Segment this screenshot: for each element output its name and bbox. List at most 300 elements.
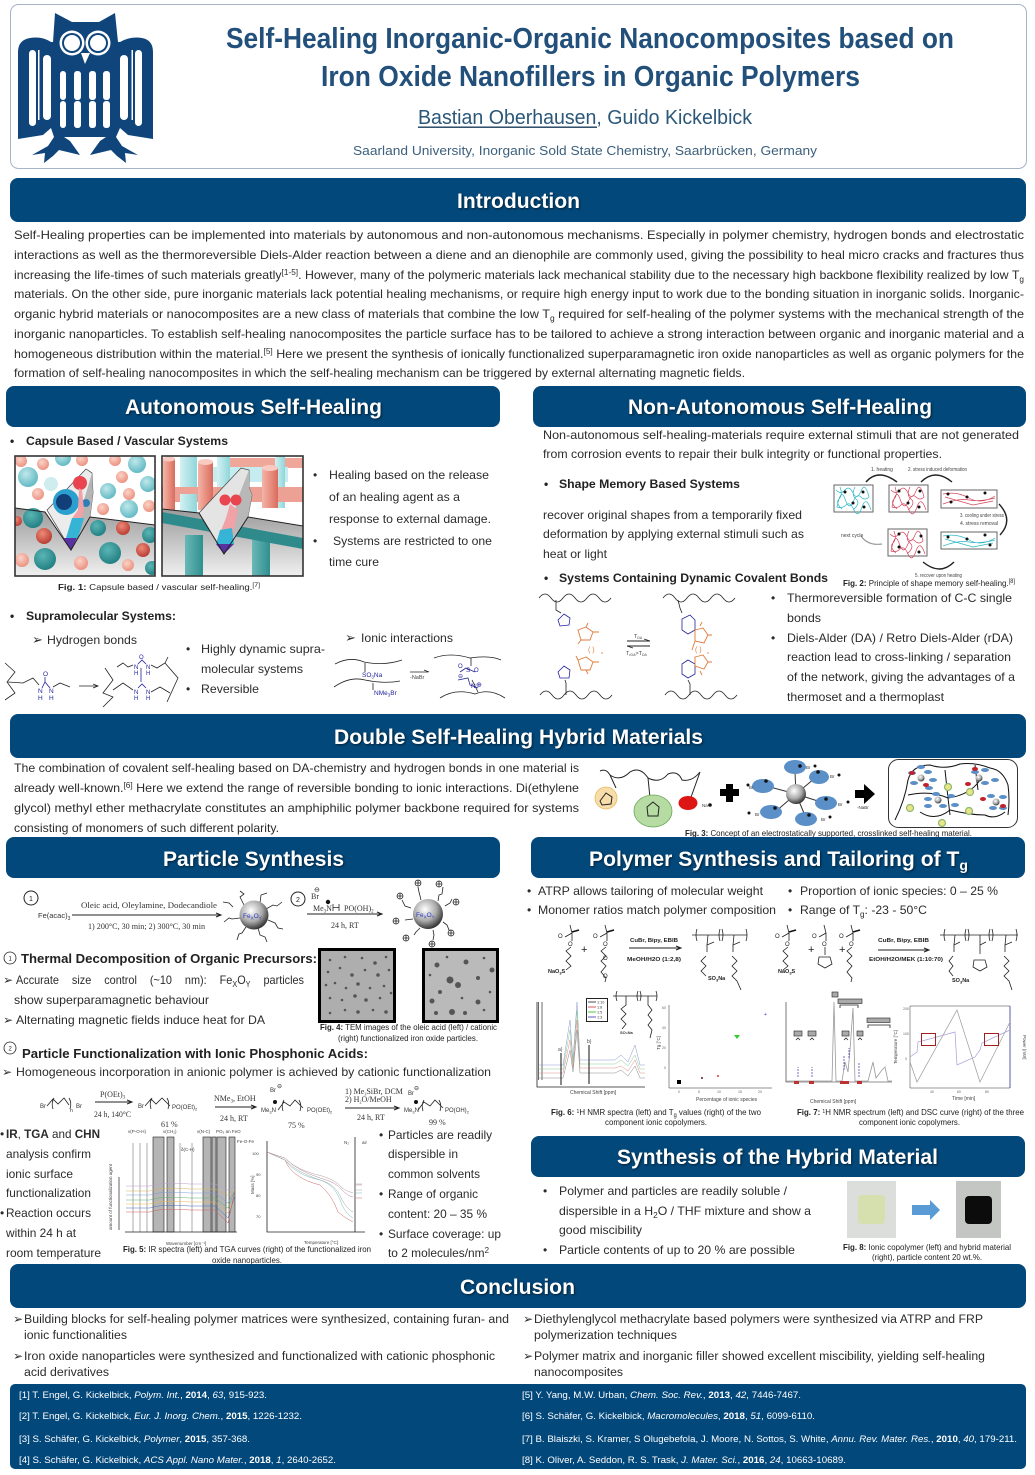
subheading: thermal decomposition: 1 <box>8 956 12 962</box>
text: dispersibility bullets: • <box>379 1187 383 1201</box>
text: Diels-Alder bullets: bonds <box>787 611 821 625</box>
chemical structure: hydrogen bonds: N <box>134 690 138 696</box>
text: dispersibility bullets: dispersible in <box>388 1147 458 1161</box>
chemical structure: ionic interactions: N <box>471 683 476 690</box>
panel: references: [4] S. Schäfer, G. Kickelbick, ACS Appl. Nano Mater. , 2018, 1, 2640-2652. <box>19 1455 336 1465</box>
chemical scheme: particle synthesis: ⊖ <box>314 887 320 894</box>
chemical scheme: phosphonic acid synthesis: NMe <box>214 1094 230 1103</box>
chart: TGA curves <box>250 1137 368 1245</box>
chemical scheme: particle synthesis: O <box>254 913 259 920</box>
chemical scheme: three component copolymer: CuBr, Bipy, EBIB <box>878 938 929 944</box>
chemical scheme: three component copolymer: NaO <box>778 969 789 975</box>
panel: references: [3] S. Schäfer, G. Kickelbick, Polymer , 2015, 357-368. <box>19 1434 250 1444</box>
text: analysis bullets: within 24 h at <box>5 1226 77 1240</box>
caption: figure 7: H NMR spectrum (left) and DSC curve (right) of the three <box>825 1107 1024 1117</box>
text: analysis bullets: IR, TGA and CHN <box>6 1127 100 1141</box>
caption: figure 4: (right) functionalized iron oxide particles. <box>338 1033 478 1043</box>
text block: introduction: materials. On the other side, pure inorganic materials lack potential healing mechanisms, or require high energy input to work due to the bonding situation in inorganic solids. Inorganic- <box>14 287 1024 301</box>
chemical scheme: three component copolymer: S <box>792 969 796 975</box>
chemical scheme: three component copolymer: EtOH/H2O/MEK (1:10:70) <box>869 957 943 963</box>
chemical scheme: phosphonic acid synthesis: 3 <box>412 1110 415 1114</box>
heading: Particle Synthesis <box>6 837 500 878</box>
text block: introduction: formation of self-healing nanocomposites in which the self-healing mechanism can be triggered by external alternating magnetic fields. <box>14 366 745 380</box>
subheading: supramolecular: • <box>10 609 14 623</box>
chemical scheme: three component copolymer: O <box>822 942 827 948</box>
chemical structure: hydrogen bonds: O <box>43 671 48 678</box>
text: introduction to non-autonomous <box>543 428 1019 461</box>
text: homogeneous incorporation: Homogeneous incorporation in anionic polymer is achieved by cationic functionalization <box>16 1065 491 1079</box>
chemical scheme: three component copolymer: O <box>849 942 854 948</box>
text block: conclusions: Building blocks for self-healing polymer matrices were synthesized, containing furan- and <box>24 1314 509 1326</box>
chemical scheme: phosphonic acid synthesis: Br <box>40 1104 46 1110</box>
chemical scheme: Diels-Alder: ( ) <box>695 647 702 654</box>
chemical scheme: two component copolymer: NaO <box>548 969 559 975</box>
caption: figure 4 <box>320 1022 498 1043</box>
chemical scheme: Diels-Alder <box>539 594 737 699</box>
subheading: dynamic covalent bonds: Systems Containing Dynamic Covalent Bonds <box>559 571 828 585</box>
text: thermal decomposition bullets: O <box>237 973 246 987</box>
chemical scheme: two component copolymer: O <box>603 942 608 948</box>
text: analysis bullets <box>0 1127 101 1260</box>
chemical scheme: three component copolymer: Na <box>962 978 970 984</box>
text: thermal decomposition bullets: Alternating magnetic fields induce heat for DA <box>16 1013 265 1027</box>
text: dispersibility bullets: • <box>379 1128 383 1142</box>
figure 3: electrostatic crosslinked material concept <box>595 760 1018 828</box>
chemical scheme: phosphonic acid synthesis: 3 <box>123 1096 126 1100</box>
chemical structure: ionic interactions: 3 <box>371 674 374 680</box>
panel: non-autonomous self-healing <box>539 428 1019 704</box>
text: dispersibility bullets: Particles are readily <box>388 1128 492 1142</box>
text: analysis bullets: analysis confirm <box>6 1147 91 1161</box>
text: Diels-Alder bullets: • <box>771 631 775 645</box>
panel: polymer synthesis <box>527 884 1027 1127</box>
heading: Conclusion <box>10 1264 1026 1308</box>
text: polymer bullets: : -23 - 50°C <box>865 903 927 917</box>
text: thermal decomposition bullets: ➢ <box>3 1013 13 1027</box>
text: dispersibility bullets <box>379 1128 501 1260</box>
chemical scheme: phosphonic acid synthesis: PO(OEt) <box>307 1108 330 1114</box>
text: polymer bullets: • <box>527 903 531 917</box>
subheading: particle functionalization: Particle Functionalization with Ionic Phosphonic Acids: <box>22 1046 368 1061</box>
chart: Tg scatter plot: 40 <box>662 1026 666 1030</box>
chemical scheme: three component copolymer: O <box>812 934 817 940</box>
chemical structure: ionic interactions: ⊕ <box>476 682 482 689</box>
chemical scheme: phosphonic acid synthesis: 24 h, RT <box>220 1114 248 1123</box>
chemical scheme: two component copolymer: CuBr, Bipy, EBIB <box>630 938 678 944</box>
text: hybrid bullets <box>543 1184 811 1257</box>
chart: Tg scatter plot: 20 <box>662 1046 666 1050</box>
heading: Synthesis of the Hybrid Material <box>531 1136 1025 1177</box>
chemical scheme: two component copolymer: S <box>562 969 566 975</box>
chart: DSC curve: 80 <box>985 1090 989 1094</box>
text block: introduction: [5] <box>264 347 273 356</box>
caption: figure 3: Fig. 3: Concept of an electrostatically supported, crosslinked self-healing material. <box>685 828 972 838</box>
chart: DSC curve: Temperature [°C] <box>893 1030 898 1064</box>
text: hybrid bullets: • <box>543 1184 547 1198</box>
chemical scheme: phosphonic acid synthesis: 75 % <box>288 1121 305 1130</box>
chemical scheme: particle synthesis: O <box>427 912 432 919</box>
chemical scheme: Diels-Alder: rDA <box>629 653 636 657</box>
chemical scheme: phosphonic acid synthesis: PO(OEt) <box>172 1105 195 1111</box>
chart: Tg scatter plot: + <box>764 1012 767 1018</box>
chemical structure: ionic interactions: NMe <box>374 690 388 697</box>
caption: figure 5: Fig. 5: IR spectra (left) and TGA curves (right) of the functionalized iron <box>123 1244 371 1254</box>
chemical structure: hydrogen bonds: H <box>134 696 138 702</box>
text block: conclusions: Polymer matrix and inorganic filler showed excellent miscibility, yielding self-healing <box>534 1351 985 1363</box>
text block: conclusions: ➢ <box>13 1349 23 1363</box>
chemical structure: ionic interactions: -NaBr <box>410 675 425 681</box>
text: shape memory: heat or light <box>543 547 608 561</box>
chemical scheme: two component copolymer: O <box>568 942 573 948</box>
caption: figure 6: 1 <box>576 1109 579 1115</box>
chemical scheme: particle synthesis: 1 <box>29 896 33 903</box>
chemical scheme: particle synthesis: X <box>251 916 254 920</box>
text block: introduction: g <box>550 314 555 323</box>
text: thermal decomposition bullets: particles <box>251 973 304 987</box>
caption: figure 1: Fig. 1: Capsule based / vascular self-healing. <box>58 582 232 592</box>
caption: figure 6: Fig. 6: <box>551 1107 574 1117</box>
text: dispersibility bullets: • <box>379 1227 383 1241</box>
chart: IR spectra: Wavenumber [cm⁻¹] <box>166 1241 206 1246</box>
chemical scheme: phosphonic acid synthesis: Me <box>261 1108 269 1114</box>
chart: NMR spectrum three-component: Chemical Shift [ppm] <box>810 1099 857 1105</box>
chart: Tg scatter plot: 10 <box>717 1090 721 1094</box>
chemical scheme: three component copolymer <box>775 925 1018 990</box>
chemical scheme: three component copolymer: + <box>808 944 814 956</box>
chemical scheme: particle synthesis: Fe <box>243 913 251 920</box>
subheading: particle functionalization: 2 <box>8 1046 12 1052</box>
text: hybrid bullets: O / THF mixture and show a <box>658 1204 811 1218</box>
chemical scheme: particle synthesis: N <box>326 904 332 913</box>
text: thermal decomposition bullets: show superparamagnetic behaviour <box>14 993 209 1007</box>
heading: Particle Synthesis: Particle Synthesis <box>163 848 344 871</box>
heading: Conclusion: Conclusion <box>460 1276 575 1299</box>
caption: figure 6: g <box>674 1113 677 1119</box>
text: dispersibility bullets: Range of organic <box>388 1187 478 1201</box>
text block: conclusions: Diethylenglycol methacrylate based polymers were synthesized via ATRP and FRP <box>534 1314 983 1326</box>
chemical scheme: particle synthesis: Br <box>311 892 319 901</box>
chemical scheme: Diels-Alder: >T <box>635 651 643 657</box>
chemical structure: hydrogen bonds: N <box>38 688 43 695</box>
text: Diels-Alder bullets <box>771 591 1015 704</box>
text: hybrid bullets: dispersible in a H <box>559 1204 651 1218</box>
chart: NMR spectra two-component: 1:10 <box>597 1000 604 1004</box>
chemical scheme: particle synthesis: 2 <box>371 910 374 914</box>
caption: figure 1: [7] <box>252 583 260 589</box>
chemical scheme: particle synthesis: Fe(acac) <box>38 911 68 920</box>
caption: figure 2: Fig. 2: Principle of shape memory self-healing. <box>843 578 1018 588</box>
caption: figure 7: Fig. 7: <box>797 1107 820 1117</box>
text: healing bullets: • <box>313 468 317 482</box>
chemical scheme: Diels-Alder: ( ) <box>588 647 595 654</box>
chemical scheme: phosphonic acid synthesis: N <box>272 1108 276 1114</box>
text block: introduction: . However, many of the polymeric materials lack mechanical stability due to the necessary high backbone flexibility realized by low T <box>298 268 1020 282</box>
chemical scheme: phosphonic acid synthesis: 2) H <box>345 1095 359 1104</box>
chemical scheme: Diels-Alder: T <box>626 651 629 657</box>
chemical scheme: particle synthesis: Y <box>259 916 262 920</box>
text: supramolecular bullets: Reversible <box>201 682 259 696</box>
chart: NMR spectra two-component: a) <box>558 1047 563 1053</box>
panel: references <box>10 1384 1026 1469</box>
text: hybrid bullets: Particle contents of up to 20 % are possible <box>559 1243 795 1257</box>
chemical scheme: phosphonic acid synthesis: ⊖ <box>277 1084 282 1090</box>
chemical structure: hydrogen bonds: H <box>146 671 150 677</box>
text: hydrogen bonds: Hydrogen bonds <box>47 633 137 647</box>
chemical structure: hydrogen bonds <box>5 655 178 707</box>
caption: figure 8 <box>843 1242 1011 1262</box>
chemical scheme: particle synthesis: 2 <box>296 897 300 904</box>
chart: DSC curve: 60 <box>957 1090 961 1094</box>
text block: conclusions: ➢ <box>523 1312 533 1326</box>
text: dispersibility bullets: 2 <box>485 1246 490 1255</box>
chemical scheme: phosphonic acid synthesis: SiBr, DCM <box>366 1087 403 1096</box>
chemical structure: hydrogen bonds: O <box>139 655 144 661</box>
chemical scheme: Diels-Alder: s <box>601 650 603 655</box>
text: analysis bullets: room temperature <box>6 1246 101 1260</box>
figure 2: shape memory cycle: 3. cooling under stress <box>960 513 1004 519</box>
chemical scheme: three component copolymer: + <box>839 944 845 956</box>
text block: introduction: Here we present the synthesis of ionically functionalized superparamagnetic iron oxide nanoparticles as well as organic polymers for the <box>273 347 1024 361</box>
chemical scheme: phosphonic acid synthesis: Me <box>404 1108 412 1114</box>
chemical structure: ionic interactions: O <box>458 664 463 670</box>
chemical scheme: two component copolymer: SO <box>708 976 716 982</box>
panel: header <box>10 4 1026 168</box>
text: polymer bullets: • <box>788 884 792 898</box>
text: polymer bullets: • <box>527 884 531 898</box>
chart: NMR spectra two-component: 1:8 <box>597 1006 602 1010</box>
chemical scheme: phosphonic acid synthesis: n <box>70 1108 73 1114</box>
chemical structure: hydrogen bonds: H <box>38 695 43 702</box>
figure 2: shape memory cycle: 4. stress removal <box>960 521 998 527</box>
text: ionic interactions: ➢ <box>345 630 356 645</box>
text: polymer bullets: ATRP allows tailoring of molecular weight <box>538 884 764 898</box>
text block: introduction: increasing the life-times of such materials greatly <box>14 268 273 282</box>
text block: double self-healing: consisting of monomers of such different polarity. <box>14 821 279 835</box>
subheading: supramolecular: Supramolecular Systems: <box>26 609 176 623</box>
chemical scheme: phosphonic acid synthesis: PO(OH) <box>445 1108 467 1114</box>
panel: particle synthesis <box>0 880 501 1265</box>
text block: introduction: g <box>1019 275 1024 284</box>
text: dispersibility bullets: Surface coverage: up <box>388 1227 501 1241</box>
chemical structure: hydrogen bonds: N <box>146 665 150 671</box>
text: Diels-Alder bullets: thermoset and a thermoplast <box>787 690 945 704</box>
caption: figure 6: component ionic copolymers. <box>605 1117 707 1127</box>
chart: Tg scatter plot: 15 <box>738 1090 742 1094</box>
chemical structure: ionic interactions: Na <box>374 672 383 679</box>
heading: Double Self-Healing Hybrid Materials <box>10 714 1026 758</box>
chart: TGA curves: 80 <box>256 1193 261 1198</box>
text: supramolecular bullets: • <box>186 642 190 656</box>
text: polymer bullets <box>527 884 998 919</box>
panel: references: [1] T. Engel, G. Kickelbick, Polym. Int. , 2014, 63, 915-923. <box>19 1390 267 1400</box>
chemical scheme: three component copolymer: O <box>839 934 844 940</box>
caption: figure 8: Fig. 8: Ionic copolymer (left) and hybrid material <box>843 1242 1011 1252</box>
text block: introduction: inorganic nanoparticles. To establish self-healing nanocomposites the particle surface has to be tailored to achieve a strong interaction between organic and inorganic material and a <box>14 327 1024 341</box>
panel: references: [5] Y. Yang, M.W. Urban, Chem. Soc. Rev. , 2013, 42, 7446-7467. <box>522 1390 801 1400</box>
chart: NMR spectra two-component: SO₃Na <box>620 1030 634 1035</box>
panel: references: [2] T. Engel, G. Kickelbick, Eur. J. Inorg. Chem. , 2015, 1226-1232. <box>19 1411 302 1421</box>
figure 3: electrostatic crosslinked material concept: Br <box>755 812 760 817</box>
chemical scheme: phosphonic acid synthesis: Br <box>408 1091 414 1097</box>
chart: DSC curve: Power [mW] <box>1022 1035 1027 1060</box>
text: hybrid bullets: good miscibility <box>559 1223 642 1237</box>
text: hybrid bullets: • <box>543 1243 547 1257</box>
chemical scheme: phosphonic acid synthesis: 3 <box>269 1110 272 1114</box>
chemical scheme: particle synthesis <box>24 880 459 947</box>
text: hydrogen bonds: ➢ <box>32 632 43 647</box>
text: Diels-Alder bullets: of the network, giving the advantages of a <box>787 670 1015 684</box>
chemical scheme: phosphonic acid synthesis: 99 % <box>429 1118 446 1127</box>
text: shape memory: recover original shapes from a temporarily fixed <box>543 508 802 522</box>
chemical scheme: phosphonic acid synthesis: N <box>415 1108 419 1114</box>
text: introduction to non-autonomous: from corrosion events to repair their bulk integrity or functional properties. <box>543 447 942 461</box>
text: dispersibility bullets: content: 20 – 35 % <box>388 1207 487 1221</box>
chemical scheme: phosphonic acid synthesis: 24 h, 140°C <box>94 1110 131 1119</box>
chemical scheme: phosphonic acid synthesis: Br <box>138 1104 144 1110</box>
chemical scheme: phosphonic acid synthesis: 2 <box>330 1110 333 1114</box>
chart: Tg scatter plot: 0 <box>664 1066 666 1070</box>
chart: TGA curves: Mass [%] <box>250 1175 255 1194</box>
authors: Bastian Oberhausen, Guido Kickelbick <box>418 107 753 129</box>
panel: autonomous self-healing: Capsule Based / Vascular Systems <box>26 434 228 448</box>
chart: TGA curves: 70 <box>256 1214 261 1219</box>
text: thermal decomposition bullets <box>3 973 304 1027</box>
text: hybrid bullets: Polymer and particles are readily soluble / <box>559 1184 788 1198</box>
chemical structure: ionic interactions: O <box>474 668 479 674</box>
chemical structure: hydrogen bonds: N <box>49 688 54 695</box>
title: Self-Healing Inorganic-Organic Nanocomposites based on <box>226 23 954 55</box>
text: Diels-Alder bullets: Thermoreversible formation of C-C single <box>787 591 1012 605</box>
chart: NMR spectra two-component <box>537 991 657 1096</box>
text: healing bullets <box>313 468 492 569</box>
chemical structure: ionic interactions: 3 <box>388 692 391 698</box>
figure 1: capsule and vascular illustrations <box>12 450 303 576</box>
text: polymer bullets: Proportion of ionic species: 0 – 25 % <box>800 884 998 898</box>
subheading: shape memory: • <box>544 477 548 491</box>
chemical scheme: two component copolymer: O <box>603 956 608 962</box>
chart: DSC curve: 40 <box>930 1090 934 1094</box>
text block: double self-healing: already well-known. <box>14 781 119 795</box>
chemical structure: hydrogen bonds: H <box>146 696 150 702</box>
heading: Polymer Synthesis and Tailoring of Tg: Polymer Synthesis and Tailoring of T <box>589 848 957 871</box>
figure 2: shape memory cycle: next cycle <box>841 533 863 539</box>
text block: introduction: interactions as well as the thermoreversible Diels-Alder reaction between a diene and an dienophile are commonly used, giving the possibility to heal micro cracks and fractures thus <box>14 248 1024 262</box>
heading: Polymer Synthesis and Tailoring of Tg: g <box>959 857 968 873</box>
chart: IR spectra: v(CH₂) <box>163 1129 177 1134</box>
chemical scheme: two component copolymer: Na <box>718 976 726 982</box>
figure 2: shape memory cycle: 5. recover upon heating <box>915 573 962 579</box>
chemical structure: ionic interactions: SO <box>362 672 371 679</box>
chemical scheme: phosphonic acid synthesis: 1) Me <box>345 1087 364 1096</box>
heading: Polymer Synthesis and Tailoring of Tg <box>531 837 1025 878</box>
text: homogeneous incorporation: ➢ <box>2 1065 12 1079</box>
chart: TGA curves: Temperature [°C] <box>304 1240 338 1245</box>
chemical scheme: two component copolymer: + <box>581 944 587 956</box>
chemical scheme: particle synthesis: 3 <box>324 910 327 914</box>
chart: TGA curves: 90 <box>256 1172 261 1177</box>
chemical scheme: phosphonic acid synthesis: Br <box>76 1104 82 1110</box>
panel: references: [8] K. Oliver, A. Seddon, R. S. Trask, J. Mater. Sci. , 2016, 24, 10663-10689. <box>522 1455 846 1465</box>
chart: Tg scatter plot: 20 <box>758 1090 762 1094</box>
chart: NMR spectra two-component: b) <box>587 1039 592 1045</box>
chemical scheme: particle synthesis: 3 <box>68 916 71 922</box>
heading: Non-Autonomous Self-Healing <box>533 386 1026 427</box>
heading: Introduction <box>10 178 1026 222</box>
text: dispersibility bullets: to 2 molecules/nm <box>388 1246 485 1260</box>
heading: Non-Autonomous Self-Healing: Non-Autonomous Self-Healing <box>628 396 932 419</box>
text block: double self-healing: glycol) methyl ether methacrylate constitutes an amphiphilic polymer backbone required for systems <box>14 801 579 815</box>
chart: DSC curve: 0 <box>905 1057 907 1061</box>
subheading: dynamic covalent bonds: • <box>544 571 548 585</box>
chemical scheme: phosphonic acid synthesis: ⊖ <box>414 1086 419 1092</box>
caption: figure 7: component ionic copolymers. <box>859 1117 960 1127</box>
chemical scheme: two component copolymer: O <box>593 934 598 940</box>
text block: introduction: required for self-healing of the polymer systems with the mechanical strength of the <box>555 307 1024 321</box>
chemical scheme: phosphonic acid synthesis: 2 <box>359 1100 361 1104</box>
chart: Tg scatter plot <box>656 1005 772 1103</box>
chart: DSC curve: 100 <box>903 1032 909 1036</box>
chemical scheme: three component copolymer: O <box>775 934 780 940</box>
text: dispersibility bullets: common solvents <box>388 1167 480 1181</box>
figure 2: shape memory cycle: 2. stress induced deformation <box>908 467 967 473</box>
chemical scheme: phosphonic acid synthesis: 3 <box>230 1100 233 1104</box>
caption: figure 2: [8] <box>1009 579 1015 585</box>
chemical scheme: Diels-Alder: DA <box>637 636 643 640</box>
figure 3: electrostatic crosslinked material concept: Br <box>806 765 811 770</box>
text: healing bullets: response to external damage. <box>329 512 491 526</box>
chart: NMR spectra two-component: Chemical Shift [ppm] <box>570 1090 617 1096</box>
figure 3: electrostatic crosslinked material concept: Br <box>749 785 754 790</box>
chart: TGA curves: 100 <box>252 1151 259 1156</box>
chart: IR spectra: v(N-C) <box>197 1129 211 1134</box>
chemical scheme: phosphonic acid synthesis: P(OEt) <box>100 1090 123 1099</box>
text: analysis bullets: ionic surface <box>6 1167 73 1181</box>
heading: Autonomous Self-Healing: Autonomous Self-Healing <box>125 396 382 419</box>
chemical structure: ionic interactions: S <box>466 667 471 674</box>
chemical structure: hydrogen bonds: N <box>146 690 150 696</box>
text: healing bullets: time cure <box>329 555 379 569</box>
chemical scheme: three component copolymer: 3 <box>960 980 963 984</box>
chemical structure: ionic interactions: ⊖ <box>458 674 463 680</box>
text block: conclusions: nanocomposites <box>534 1367 623 1379</box>
text block: introduction: organic hybrid materials or nanocomposites are a new class of materials that combine the low T <box>14 307 522 321</box>
text: healing bullets: • <box>313 534 317 548</box>
text block: conclusions <box>13 1312 985 1379</box>
chemical scheme: two component copolymer: MeOH/H2O (1:2,8) <box>627 957 681 963</box>
chemical scheme: phosphonic acid synthesis: 3 <box>364 1092 366 1096</box>
chemical scheme: phosphonic acid synthesis: 2 <box>195 1106 198 1112</box>
figure 3: electrostatic crosslinked material concept: -NaBr <box>857 805 869 810</box>
panel: references: [6] S. Schäfer, G. Kickelbick, Macromolecules , 2018, 51, 6099-6110. <box>522 1411 815 1421</box>
chart: NMR spectrum three-component <box>786 992 892 1105</box>
text: polymer bullets: Range of T <box>800 903 859 917</box>
chemical scheme: phosphonic acid synthesis <box>40 1084 470 1130</box>
text block: conclusions: acid derivatives <box>24 1367 109 1379</box>
chemical scheme: Diels-Alder: s <box>707 650 709 655</box>
text block: conclusions: ➢ <box>523 1349 533 1363</box>
chart: IR spectra: amount of functionalization agent <box>108 1163 113 1230</box>
chemical structure: hydrogen bonds: N <box>134 665 138 671</box>
caption: figure 4: Fig. 4: TEM images of the oleic acid (left) / cationic <box>320 1022 498 1032</box>
chart: TGA curves: N₂ <box>344 1140 349 1145</box>
chart: TGA curves: air <box>362 1140 368 1145</box>
caption: figure 6 <box>551 1107 761 1127</box>
caption: figure 6: H NMR spectra (left) and T <box>579 1107 674 1117</box>
text: introduction to non-autonomous: Non-autonomous self-healing-materials require external stimuli that are not generated <box>543 428 1019 442</box>
chart: IR spectra: δ(C-H) <box>181 1147 195 1152</box>
text: Diels-Alder bullets: Diels-Alder (DA) / Retro Diels-Alder (rDA) <box>787 631 1013 645</box>
text: ionic interactions: Ionic interactions <box>361 631 453 645</box>
